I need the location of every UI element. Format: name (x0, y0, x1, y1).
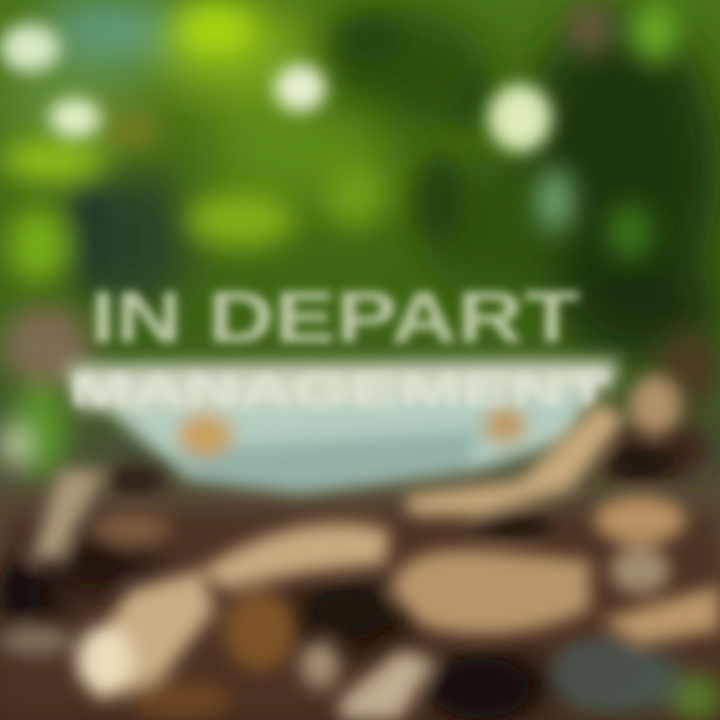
foliage backdrop (0, 0, 720, 360)
heading: IN DEPART (90, 278, 580, 358)
left background (0, 305, 720, 478)
wood chips pile (0, 375, 720, 720)
subheading: MANAGEMENT (70, 366, 610, 415)
water panel (65, 360, 620, 495)
